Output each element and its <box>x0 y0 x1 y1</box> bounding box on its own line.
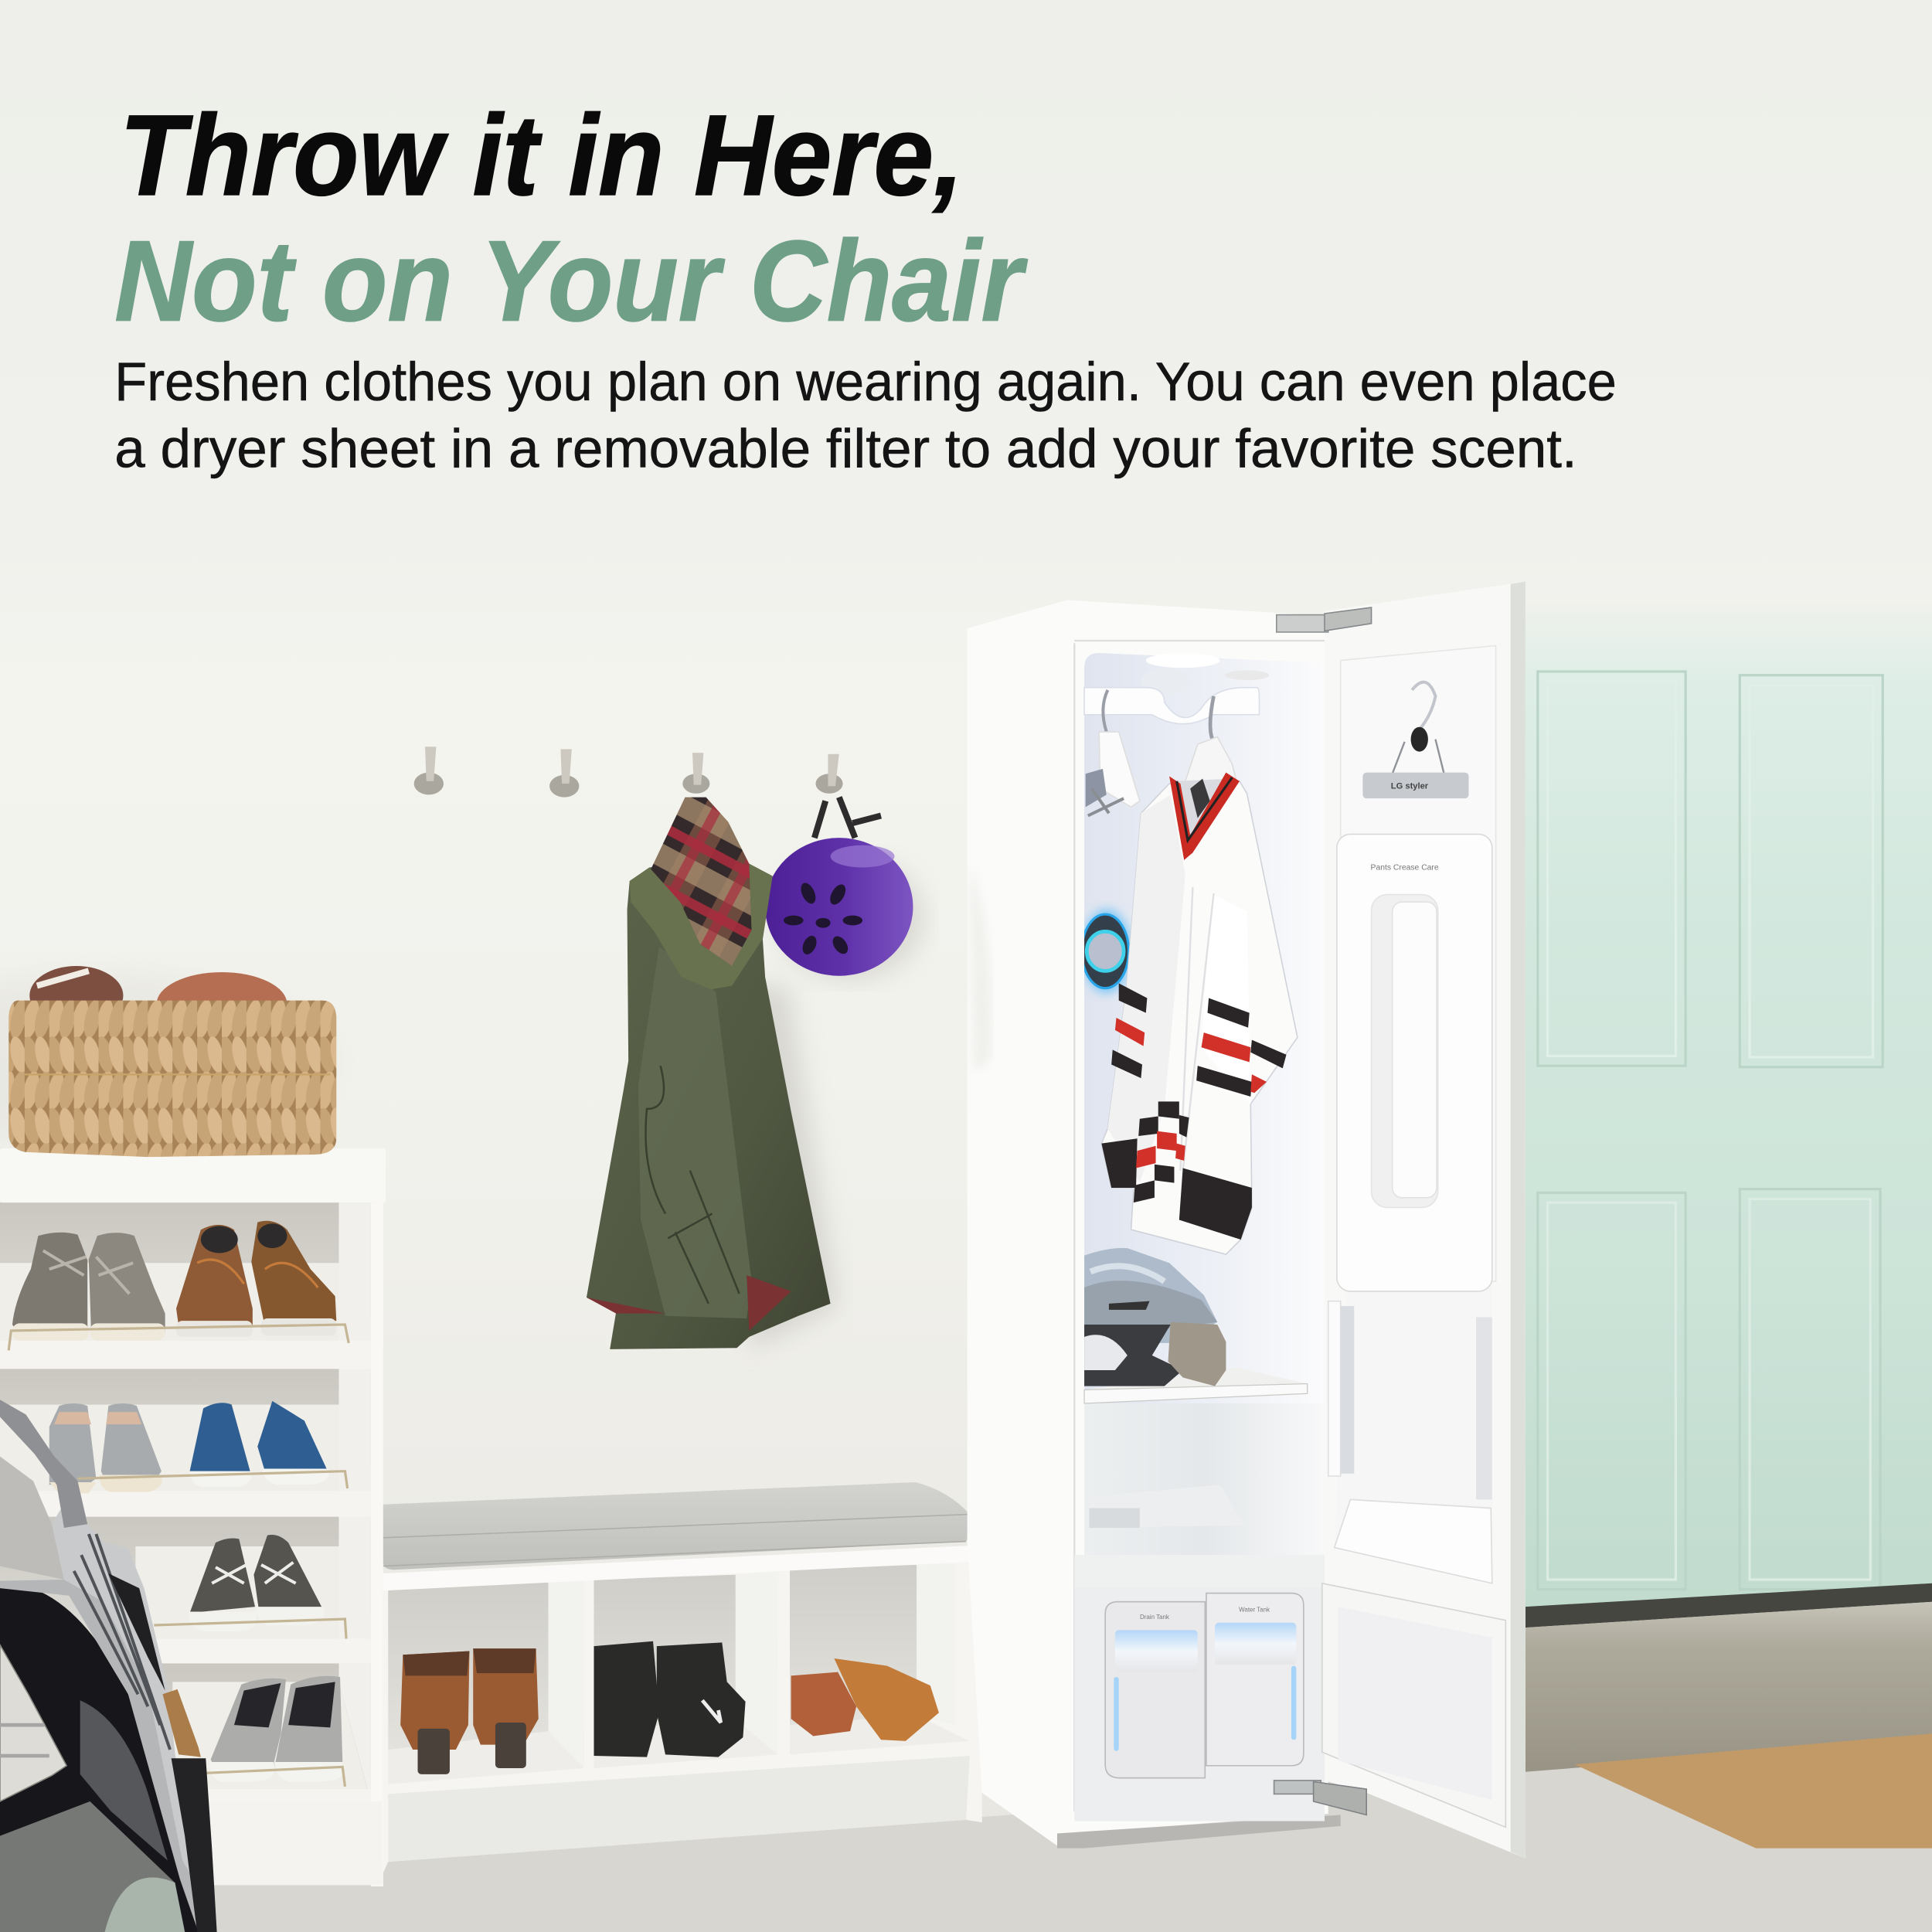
brown boat shoes <box>176 1221 336 1337</box>
small hanger <box>1086 690 1140 815</box>
basketball <box>156 972 287 1036</box>
cabinet plinth <box>0 1801 382 1885</box>
dark lower body <box>0 1582 199 1932</box>
door threshold and step <box>1526 1583 1932 1772</box>
light grey slip-ons <box>49 1403 162 1493</box>
bench body <box>383 1545 982 1872</box>
shoes on shelf 2 <box>49 1401 348 1493</box>
cabinet side wall <box>338 1202 371 1801</box>
top door hinge <box>1277 607 1372 632</box>
lower door panel <box>1322 1583 1505 1827</box>
garage floor <box>0 1725 1932 1932</box>
collar <box>1169 773 1240 860</box>
grey sneakers <box>12 1233 165 1341</box>
plaid scarf <box>649 798 752 966</box>
cabinet top board <box>0 1148 386 1202</box>
interior top hanger rail <box>1084 653 1269 724</box>
neck opening <box>1173 779 1232 850</box>
shelf floors <box>0 1263 369 1789</box>
shoes in bench cubbies <box>400 1641 939 1774</box>
mint entry door <box>1523 604 1932 1608</box>
interior shelf <box>1084 1368 1308 1403</box>
subtitle text: a dryer sheet in a removable filter to add your favorite scent. <box>114 417 1577 478</box>
reflective hood panel <box>0 1457 64 1580</box>
chrome surround <box>0 1580 217 1932</box>
water tank <box>1206 1594 1304 1766</box>
chrome top trim <box>0 1400 87 1528</box>
plaid lining at hem <box>587 1298 665 1314</box>
subtitle text: Freshen clothes you plan on wearing again. You can even place <box>114 351 1617 412</box>
bench <box>383 1482 982 1872</box>
cubby openings <box>388 1582 549 1750</box>
hood rim <box>630 864 773 989</box>
purple helmet <box>765 798 924 980</box>
styler open door <box>1274 582 1526 1858</box>
hook 3 <box>682 753 709 794</box>
bench cushion <box>383 1482 970 1570</box>
water tank: Water Tank <box>1239 1606 1270 1613</box>
trouser hanger: LG styler <box>1391 781 1429 791</box>
wicker basket <box>9 1001 336 1157</box>
trouser hanger <box>1362 682 1469 798</box>
car headlight <box>0 1645 66 1801</box>
black cleats <box>594 1641 746 1757</box>
shoes on shelf 4 <box>206 1676 345 1787</box>
blue UV fan light <box>1082 910 1131 993</box>
brown boots <box>400 1648 539 1774</box>
coat body <box>587 862 831 1349</box>
sports balls <box>29 966 287 1036</box>
shoes on shelf 1 <box>9 1221 349 1350</box>
door panels <box>1538 672 1883 1590</box>
green coat with plaid scarf <box>587 798 838 1349</box>
shoe cabinet <box>0 1148 386 1886</box>
drain tank: Drain Tank <box>1140 1614 1169 1621</box>
lower body reflection <box>0 1801 185 1932</box>
rail <box>77 1471 348 1488</box>
cabinet front edge <box>1074 641 1325 1811</box>
bench plinth <box>388 1756 970 1862</box>
silver hockey helmet <box>1084 1248 1226 1386</box>
blue dotted slip-ons <box>190 1401 329 1487</box>
door inner recess <box>1341 645 1496 1281</box>
jersey stripes <box>1101 983 1287 1240</box>
jersey hanger <box>1183 696 1238 788</box>
car front in the foreground <box>0 1400 217 1932</box>
hook 4 <box>815 754 843 794</box>
hockey jersey <box>1101 773 1298 1254</box>
pants crease care press <box>1337 834 1492 1291</box>
side rails <box>1328 1301 1492 1499</box>
hook 2 <box>549 749 579 798</box>
lower crease fold <box>1335 1499 1492 1583</box>
baseball gloves <box>791 1658 939 1741</box>
chrome grille slats <box>52 1481 197 1885</box>
styler cabinet <box>968 600 1341 1849</box>
lower interior ledge <box>1074 1485 1325 1587</box>
rail <box>9 1325 349 1350</box>
shoes on shelf 3 <box>154 1535 346 1639</box>
subtitle text <box>114 351 1617 478</box>
interior <box>1084 653 1325 1405</box>
cabinet bays <box>0 1202 376 1341</box>
title <box>114 92 1028 345</box>
door mat <box>1575 1733 1932 1849</box>
wall hooks <box>414 747 843 798</box>
drain tank <box>1105 1602 1205 1778</box>
shelf fronts <box>0 1341 371 1801</box>
title line 2: Not on Your Chair <box>114 218 1028 345</box>
pants crease care press: Pants Crease Care <box>1371 864 1439 872</box>
cabinet base <box>1057 1815 1341 1849</box>
grille dark slot <box>108 1573 165 1691</box>
football <box>29 966 123 1026</box>
hook 1 <box>414 747 444 794</box>
title line 1: Throw it in Here, <box>120 92 964 219</box>
front sleeve highlight <box>638 946 752 1318</box>
bottom door hinge <box>1274 1781 1366 1815</box>
water tank drawers <box>1074 1587 1325 1821</box>
basket reflection in bumper <box>162 1689 201 1757</box>
bench top board <box>383 1545 982 1590</box>
fender reflection <box>80 1700 168 1861</box>
dark bumper insert <box>172 1758 217 1932</box>
